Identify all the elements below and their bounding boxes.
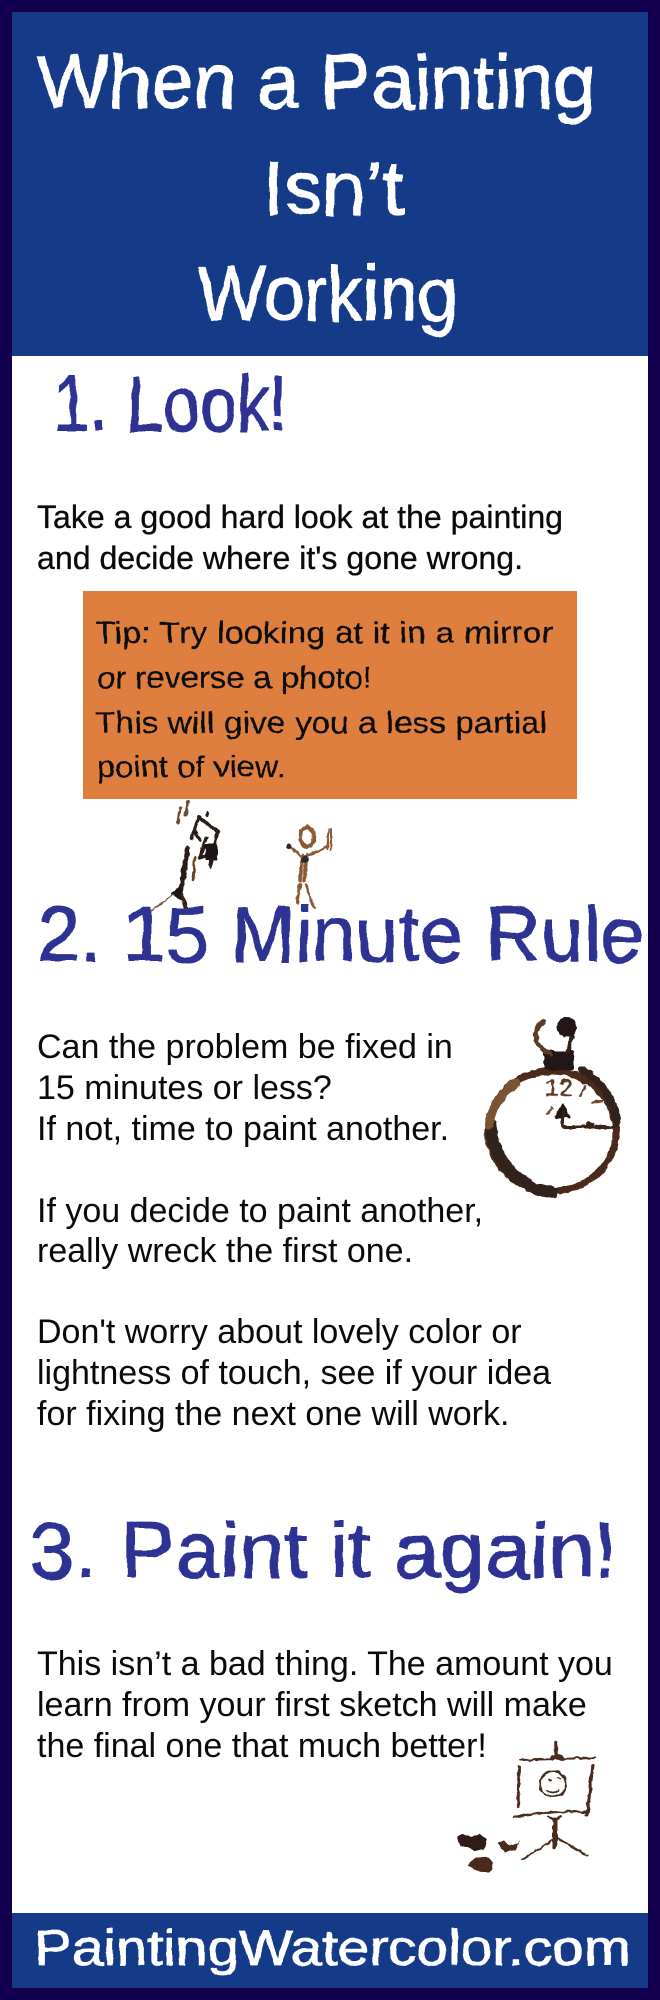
icon: stopwatch: 12: [545, 1075, 573, 1102]
tip text: [95, 615, 553, 784]
text block: paint it again: This isn’t a bad thing. The amount you: [37, 1645, 613, 1683]
title: Working: [198, 252, 458, 337]
title: When a Painting: [37, 40, 596, 125]
text block: 15 minute rule: Don't worry about lovely color or: [37, 1313, 522, 1351]
icon: easel with smiling painting: [514, 1743, 595, 1860]
heading: 1. Look!: 1. Look!: [53, 359, 288, 448]
text block: paint it again: learn from your first sketch will make: [37, 1686, 587, 1724]
footer banner: [12, 1913, 648, 1988]
title: [37, 40, 596, 337]
tip text: or reverse a photo!: [97, 660, 372, 695]
text block: 15 minute rule: If you decide to paint another,: [37, 1192, 483, 1230]
text block: 15 minute rule: [37, 1028, 551, 1433]
text block: look instructions: [37, 499, 563, 576]
text block: look instructions: and decide where it's gone wrong.: [37, 540, 523, 576]
panel: tip callout: [83, 591, 577, 799]
text block: 15 minute rule: lightness of touch, see if your idea: [37, 1354, 551, 1392]
tip text: point of view.: [97, 749, 286, 784]
title: Isn’t: [263, 147, 404, 232]
icon: painter figure at easel, dark brush sketch: [146, 802, 218, 915]
text block: 15 minute rule: 15 minutes or less?: [37, 1069, 332, 1107]
header banner: [12, 12, 648, 356]
text block: 15 minute rule: really wreck the first one.: [37, 1232, 413, 1270]
text block: 15 minute rule: If not, time to paint another.: [37, 1110, 449, 1148]
footer website text: PaintingWatercolor.com: [34, 1920, 631, 1976]
text block: paint it again: the final one that much better!: [37, 1727, 487, 1765]
text block: 15 minute rule: for fixing the next one will work.: [37, 1395, 509, 1433]
heading: 3. Paint it again!: 3. Paint it again!: [29, 1506, 617, 1594]
tip text: Tip: Try looking at it in a mirror: [95, 615, 553, 650]
text block: 15 minute rule: Can the problem be fixed in: [37, 1028, 453, 1066]
tip text: This will give you a less partial: [95, 705, 547, 740]
icon: stick figure with raised arm: [286, 827, 331, 908]
heading: 2. 15 Minute Rule: 2. 15 Minute Rule: [37, 890, 644, 978]
icon: paint pots and brush blobs: [457, 1833, 519, 1872]
text block: paint it again: [37, 1645, 613, 1765]
text block: look instructions: Take a good hard look at the painting: [37, 499, 563, 535]
icon: stopwatch: [488, 1017, 618, 1192]
